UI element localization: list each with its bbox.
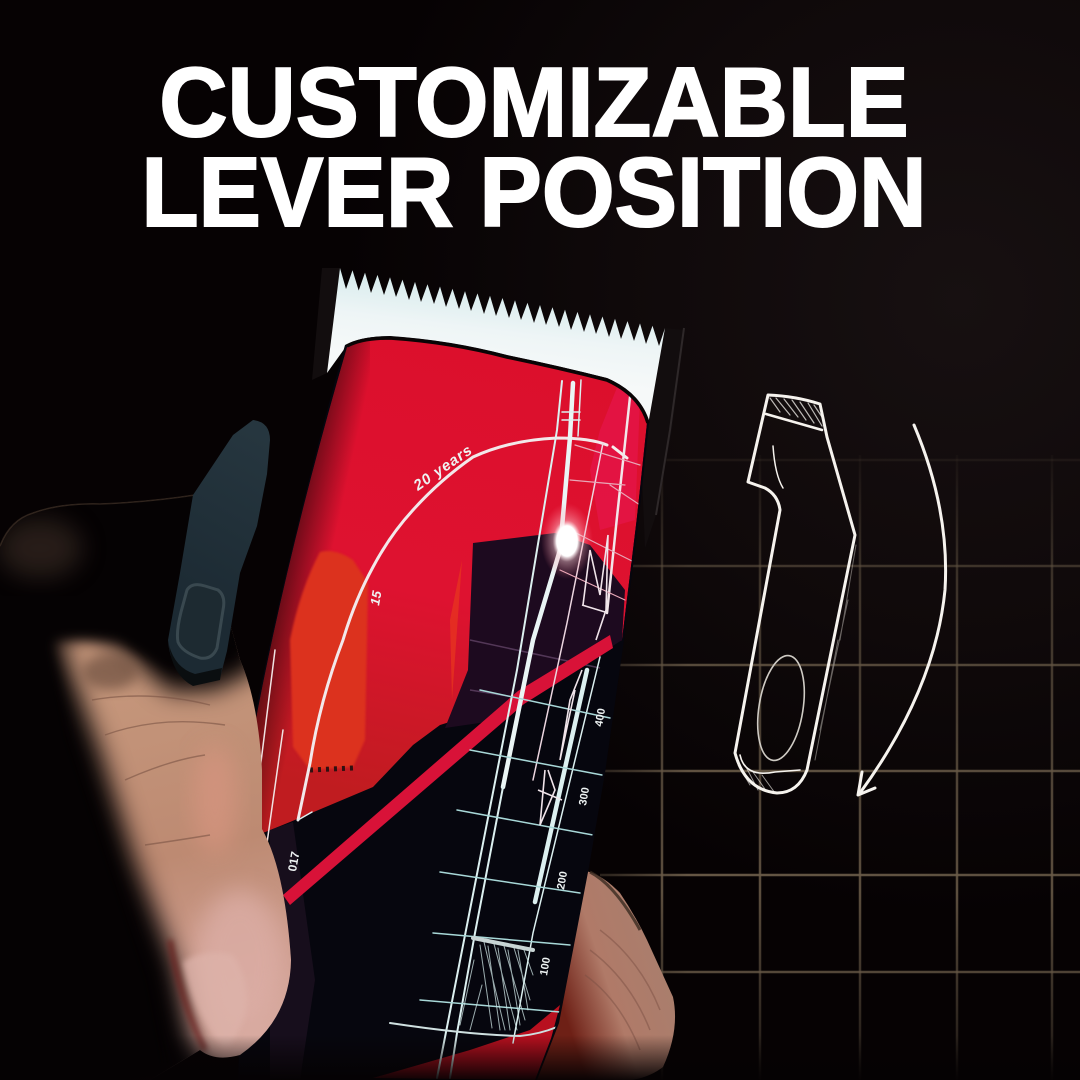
grid lines [600,455,1080,1080]
signature scribbles [538,535,608,825]
title: LEVER POSITION [141,137,927,247]
ruler numbers and body text: 15 [367,589,385,607]
clipper body [238,336,649,1080]
icon: clipper lever [168,420,270,686]
finger oval [751,652,811,764]
hand and thumb [0,460,300,1080]
ruler numbers and body text: 400 [593,707,608,728]
title: CUSTOMIZABLE [159,47,909,157]
lower red band [373,1005,560,1080]
lever outline [735,395,855,793]
glare [541,503,593,579]
orange patch [290,551,368,770]
clipper housing sides [312,268,685,548]
ruler numbers and body text [285,441,608,977]
title [141,47,927,247]
blueprint lines [260,380,640,1078]
red panel [240,338,647,835]
curved arrow [860,425,946,793]
red diagonal stripe [283,635,613,905]
finger behind clipper [535,870,675,1080]
ruler numbers and body text: 200 [555,870,570,891]
ruler numbers and body text: 300 [577,786,592,807]
ruler numbers and body text: 20 years [410,441,476,495]
dark purple stripe [270,822,315,1080]
top hatching [770,398,824,426]
ruler numbers and body text: 100 [538,956,553,977]
bottom fade [0,1035,1080,1080]
sketch of lever with curved arrow [735,395,946,795]
dark edge shadow [256,341,370,832]
ruler numbers and body text: 017 [285,850,302,873]
clipper blade teeth [327,268,665,425]
dark rectangle [445,533,625,728]
